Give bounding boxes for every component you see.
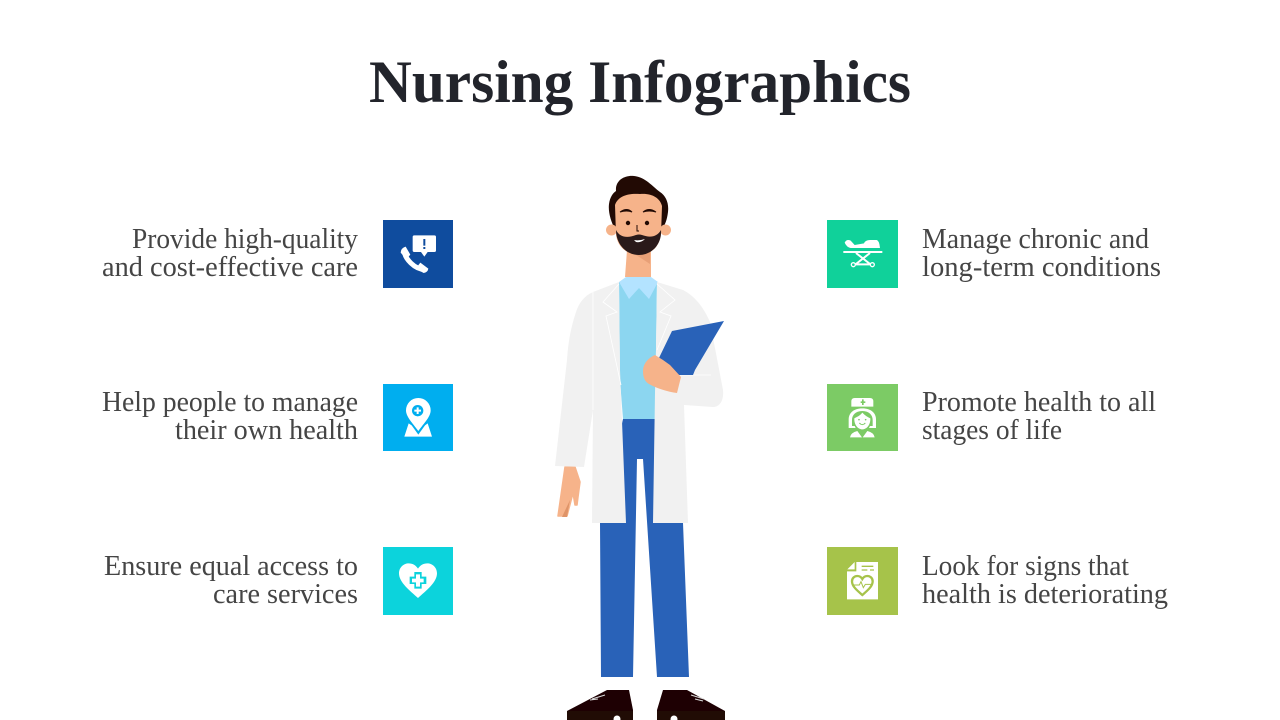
icon: heart with cross on teal square (383, 547, 453, 615)
right hand (643, 355, 681, 393)
icon: stretcher on green square (827, 220, 898, 288)
text block: quality care: and cost-effective care (102, 251, 358, 283)
shoes (567, 690, 725, 720)
text block: self management: their own health (175, 414, 358, 446)
text block: chronic conditions (922, 223, 1161, 283)
text block: chronic conditions: Manage chronic and (922, 223, 1149, 255)
text block: equal access: care services (213, 578, 358, 610)
text block: chronic conditions: long-term conditions (922, 251, 1161, 283)
face (615, 194, 662, 254)
icon: nurse on green square (827, 384, 898, 451)
text block: quality care: Provide high-quality (132, 223, 358, 255)
clipboard (658, 321, 724, 375)
hair (609, 176, 668, 229)
text block: health promotion: Promote health to all (922, 386, 1156, 418)
title: Nursing Infographics (369, 49, 911, 115)
coat seams (593, 284, 711, 410)
text block: health promotion (922, 386, 1156, 446)
icon: phone with alert on navy square (383, 220, 453, 288)
beard (616, 230, 661, 255)
left hand (558, 467, 580, 516)
collar (619, 277, 658, 299)
text block: quality care (102, 223, 358, 283)
text block: warning signs (922, 550, 1168, 610)
text block: equal access (104, 550, 358, 610)
ears (606, 224, 671, 236)
text block: health promotion: stages of life (922, 414, 1062, 446)
icon: location pin on blue square (383, 384, 453, 451)
text block: warning signs: Look for signs that (922, 550, 1129, 582)
facial features (620, 210, 656, 231)
nurse figure (555, 176, 725, 720)
neck (625, 250, 651, 277)
lab coat (555, 282, 723, 523)
text block: self management: Help people to manage (102, 386, 358, 418)
text block: self management (102, 386, 358, 446)
shirt (619, 282, 657, 419)
text block: warning signs: health is deteriorating (922, 578, 1168, 610)
trousers (600, 419, 689, 677)
icon: health report on olive square (827, 547, 898, 615)
text block: equal access: Ensure equal access to (104, 550, 358, 582)
